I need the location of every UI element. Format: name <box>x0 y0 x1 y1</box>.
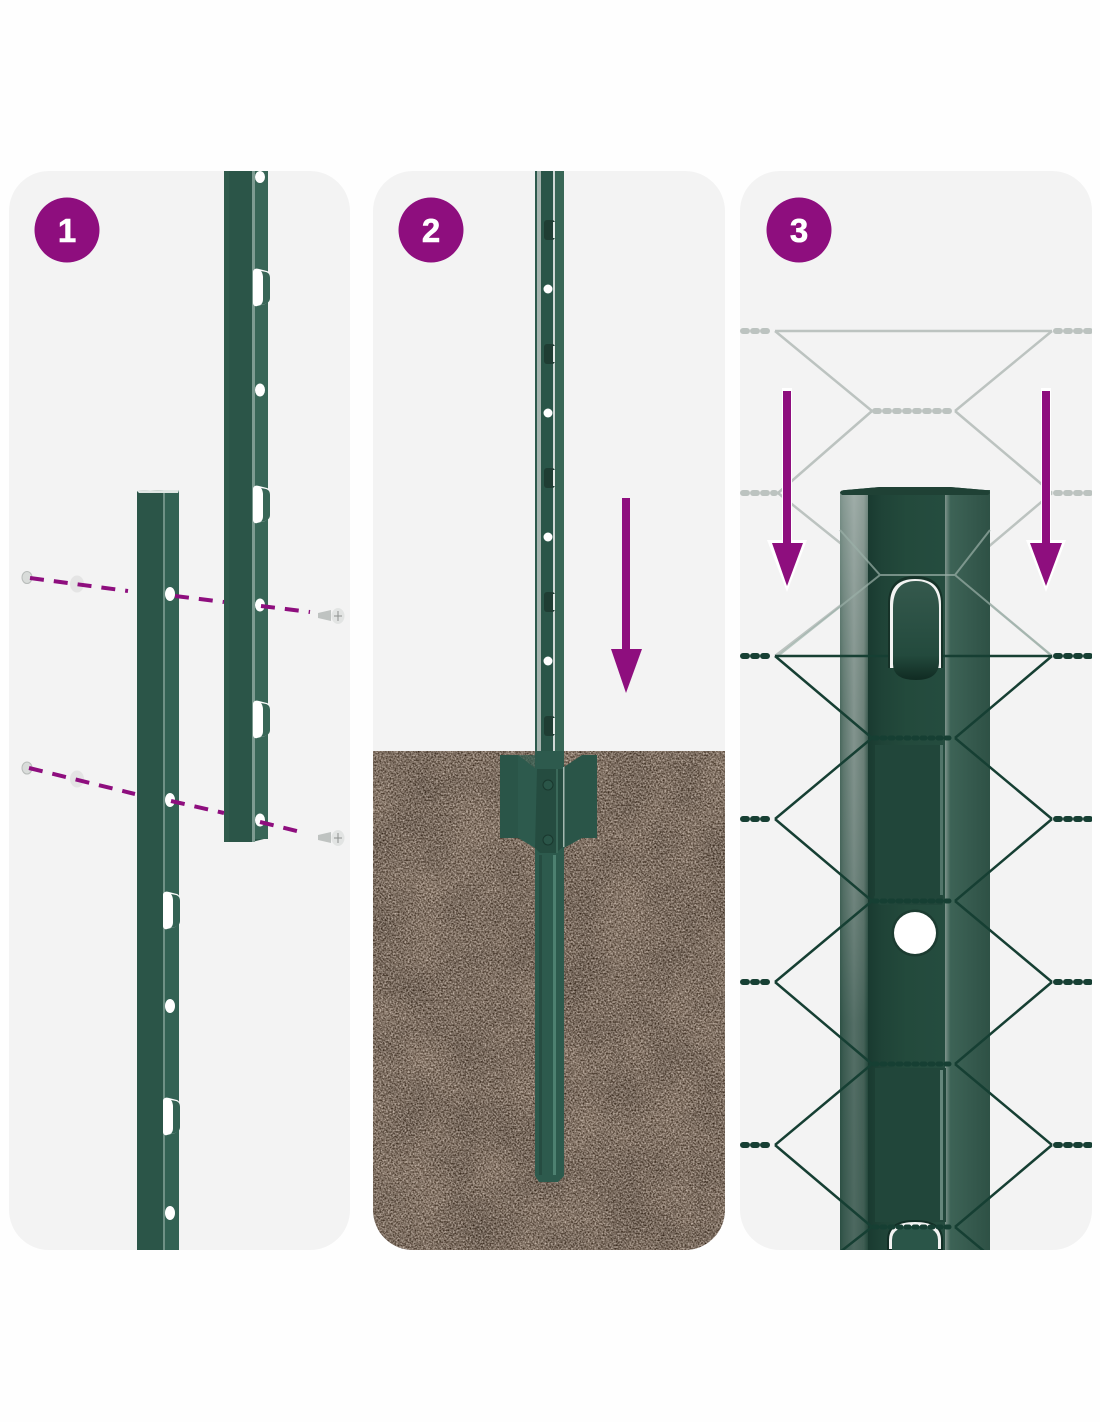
panel: step 1 join posts <box>9 171 350 1250</box>
dashed assembly lines <box>29 578 310 833</box>
post in the ground <box>535 171 564 1182</box>
grey mesh behind, before lowering <box>743 331 1090 656</box>
step number badge 3: 3 <box>790 212 808 249</box>
lower post <box>137 490 180 1250</box>
step number badge 1: 1 <box>58 212 76 249</box>
panel 2 background <box>373 171 725 1250</box>
washers and nuts <box>22 572 84 788</box>
panel 3 background <box>740 171 1092 1250</box>
upper post <box>224 171 270 842</box>
panel 1 background <box>9 171 350 1250</box>
step number badge 3 <box>766 198 832 262</box>
anchor plate <box>500 755 597 853</box>
panel: step 3 attach wire mesh <box>740 171 1092 1252</box>
left arrow down <box>767 388 807 592</box>
round hole in post <box>892 910 938 956</box>
right arrow down <box>1026 388 1066 592</box>
step number badge 2: 2 <box>422 212 440 249</box>
green wire mesh <box>743 656 1090 1252</box>
screws <box>318 608 344 846</box>
step number badge 2 <box>398 198 464 262</box>
panel: step 2 drive post into ground <box>373 171 725 1250</box>
grey wires seen over post <box>778 530 1052 656</box>
lower slot in post <box>888 1221 942 1250</box>
soil <box>373 751 725 1250</box>
step number badge 1 <box>34 198 100 262</box>
slot in post <box>888 576 943 680</box>
large post <box>840 487 990 1250</box>
arrow down <box>611 498 642 693</box>
